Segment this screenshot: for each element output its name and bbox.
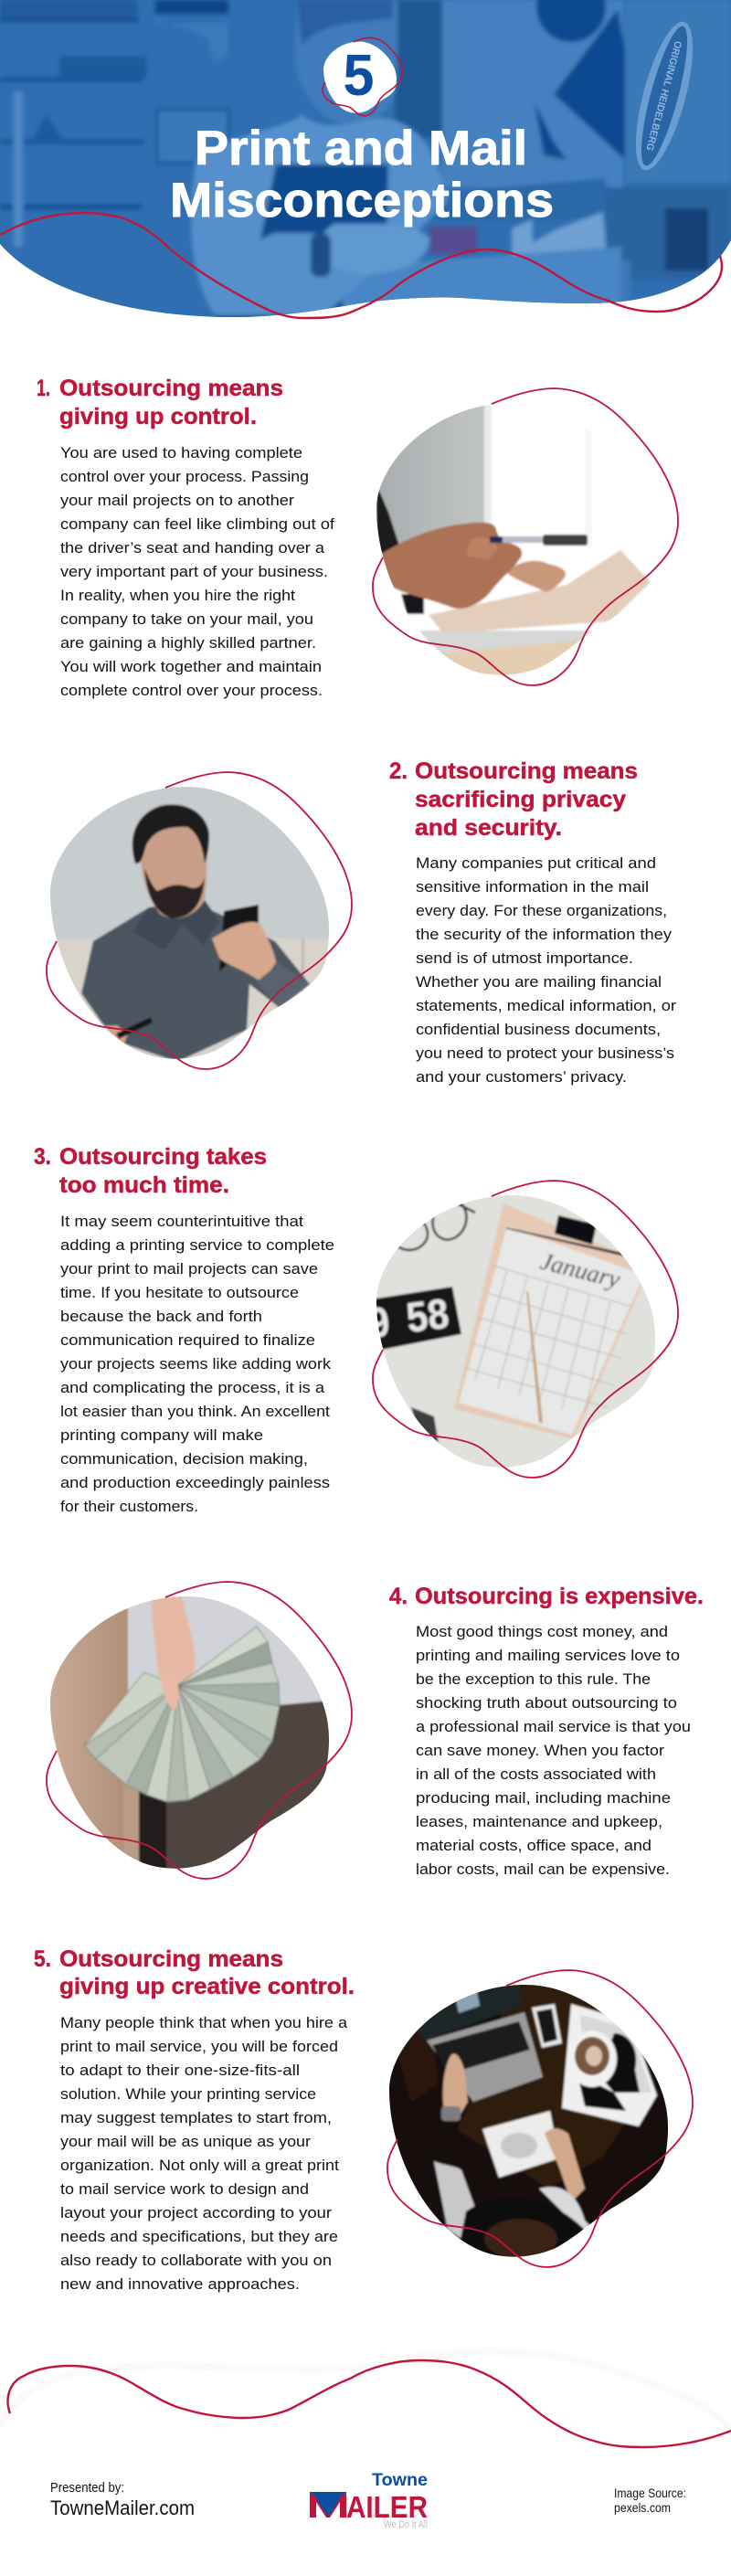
body text 1: the driver’s seat and handing over a [60, 540, 325, 557]
icon: number badge: 5 [344, 42, 375, 108]
body text 1: very important part of your business. [60, 564, 328, 580]
title: Misconceptions [170, 174, 554, 228]
body text 1: control over your process. Passing [60, 469, 309, 485]
body text 4 [416, 1624, 691, 1878]
body text 5: also ready to collaborate with you on [60, 2253, 332, 2269]
poster sign [636, 22, 693, 170]
body text 3: your print to mail projects can save [60, 1261, 318, 1277]
photo: desk with laptop, coffee and notebook [384, 1978, 676, 2262]
heading 3: too much time. [59, 1172, 229, 1198]
photo: calendar on clipboard: January [538, 1247, 623, 1293]
image source: Image Source: [614, 2486, 686, 2500]
panel: header banner [0, 0, 731, 323]
body text 2: statements, medical information, or [416, 998, 677, 1014]
body text 2: the security of the information they [416, 927, 673, 943]
body text 3: and production exceedingly painless [60, 1475, 330, 1491]
poster sign: ORIGINAL HEIDELBERG [643, 39, 683, 152]
body text 1: are gaining a highly skilled partner. [60, 635, 316, 652]
body text 2: every day. For these organizations, [416, 903, 667, 919]
body text 5: solution. While your printing service [60, 2086, 316, 2103]
body text 1 [60, 445, 334, 699]
body text 2: and your customers’ privacy. [416, 1069, 627, 1086]
header red wave [0, 213, 722, 318]
body text 3: for their customers. [60, 1499, 198, 1515]
body text 2 [416, 855, 677, 1086]
body text 2: confidential business documents, [416, 1022, 661, 1038]
heading 3 [34, 1144, 267, 1198]
body text 4: shocking truth about outsourcing to [416, 1695, 677, 1712]
body text 2: you need to protect your business’s [416, 1045, 674, 1062]
heading 2 [389, 758, 638, 841]
logo: Towne Mailer [310, 2471, 428, 2530]
panel: misconception 1 [37, 376, 678, 699]
logo: Towne Mailer: Towne [372, 2471, 428, 2490]
red outline 3 [373, 1181, 678, 1478]
body text 3: time. If you hesitate to outsource [60, 1285, 299, 1301]
body text 5: Many people think that when you hire a [60, 2015, 348, 2031]
header photo with blue tint [0, 0, 731, 323]
heading 1 [37, 376, 283, 429]
body text 3: because the back and forth [60, 1309, 262, 1325]
photo: calendar on clipboard [366, 1188, 662, 1471]
body text 3: lot easier than you think. An excellent [60, 1404, 330, 1420]
presented by: Presented by: [50, 2480, 124, 2496]
heading 4: Outsourcing is expensive. [415, 1584, 704, 1609]
body text 5: organization. Not only will a great print [60, 2157, 339, 2174]
photo: calendar on clipboard: 9 [366, 1298, 392, 1347]
logo: Towne Mailer: AILER [346, 2490, 428, 2524]
heading 5: giving up creative control. [59, 1974, 355, 1999]
photo: calendar on clipboard: 58 [404, 1289, 451, 1341]
footer [0, 2351, 731, 2530]
body text 3 [60, 1214, 334, 1515]
heading 3: 3. [34, 1144, 51, 1170]
body text 1: complete control over your process. [60, 683, 323, 699]
photo: hand holding fan of cash [46, 1590, 338, 1873]
heading 3: Outsourcing takes [59, 1144, 267, 1170]
red outline 5 [387, 1970, 693, 2267]
image source: pexels.com [614, 2500, 671, 2515]
heading 4: 4. [389, 1584, 408, 1609]
photo: man looking at phone [46, 781, 338, 1066]
heading 2: 2. [389, 758, 408, 784]
body text 5: your mail will be as unique as your [60, 2134, 312, 2150]
body text 4: be the exception to this rule. The [416, 1671, 651, 1688]
heading 1: 1. [37, 376, 50, 401]
red outline 1 [373, 388, 678, 685]
body text 5: to mail service work to design and [60, 2181, 309, 2198]
body text 4: labor costs, mail can be expensive. [416, 1861, 670, 1878]
body text 5: needs and specifications, but they are [60, 2229, 338, 2245]
heading 5: Outsourcing means [59, 1946, 283, 1972]
body text 2: sensitive information in the mail [416, 879, 649, 896]
body text 5: print to mail service, you will be forced [60, 2039, 338, 2055]
body text 3: your projects seems like adding work [60, 1356, 332, 1373]
heading 5: 5. [34, 1946, 51, 1972]
body text 4: printing and mailing services love to [416, 1648, 680, 1664]
body text 4: can save money. When you factor [416, 1743, 665, 1759]
body text 3: communication, decision making, [60, 1451, 308, 1468]
body text 3: communication required to finalize [60, 1332, 315, 1349]
footer red wave [8, 2360, 731, 2447]
body text 1: your mail projects on to another [60, 493, 295, 509]
body text 3: It may seem counterintuitive that [60, 1214, 303, 1230]
body text 1: You are used to having complete [60, 445, 302, 461]
body text 5: may suggest templates to start from, [60, 2110, 332, 2126]
panel: misconception 4 [46, 1582, 704, 1879]
footer background curve [0, 2351, 731, 2431]
body text 4: a professional mail service is that you [416, 1719, 691, 1735]
body text 3: adding a printing service to complete [60, 1237, 334, 1254]
icon: number badge [323, 37, 402, 116]
body text 4: in all of the costs associated with [416, 1766, 656, 1783]
heading 2: Outsourcing means [415, 758, 638, 784]
body text 5: new and innovative approaches. [60, 2276, 300, 2293]
body text 4: producing mail, including machine [416, 1790, 671, 1807]
body text 4: leases, maintenance and upkeep, [416, 1814, 662, 1830]
body text 5 [60, 2015, 348, 2293]
red outline 4 [47, 1582, 352, 1879]
red outline 2 [47, 772, 352, 1069]
body text 5: to adapt to their one-size-fits-all [60, 2062, 300, 2079]
presented by: TowneMailer.com [50, 2496, 195, 2519]
title [170, 122, 554, 228]
body text 1: company can feel like climbing out of [60, 516, 334, 533]
body text 3: printing company will make [60, 1427, 263, 1444]
panel: misconception 3 [34, 1144, 678, 1515]
photo: hands passing envelope [376, 402, 660, 676]
body text 1: You will work together and maintain [60, 659, 322, 675]
body text 3: and complicating the process, it is a [60, 1380, 325, 1396]
heading 2: and security. [415, 815, 562, 841]
heading 2: sacrificing privacy [415, 787, 626, 812]
panel: misconception 2 [46, 758, 677, 1086]
body text 1: In reality, when you hire the right [60, 588, 295, 604]
body text 4: material costs, office space, and [416, 1838, 652, 1854]
heading 1: giving up control. [59, 404, 257, 429]
body text 2: Whether you are mailing financial [416, 974, 662, 991]
image source [614, 2486, 686, 2515]
presented by [50, 2480, 195, 2519]
body text 2: send is of utmost importance. [416, 950, 633, 967]
panel: misconception 5 [34, 1946, 693, 2293]
title: Print and Mail [195, 122, 527, 175]
body text 5: layout your project according to your [60, 2205, 333, 2221]
heading 1: Outsourcing means [59, 376, 283, 401]
heading 5 [34, 1946, 355, 1999]
body text 4: Most good things cost money, and [416, 1624, 668, 1640]
body text 2: Many companies put critical and [416, 855, 656, 872]
logo: Towne Mailer: We Do It All [384, 2519, 428, 2530]
body text 1: company to take on your mail, you [60, 611, 313, 628]
